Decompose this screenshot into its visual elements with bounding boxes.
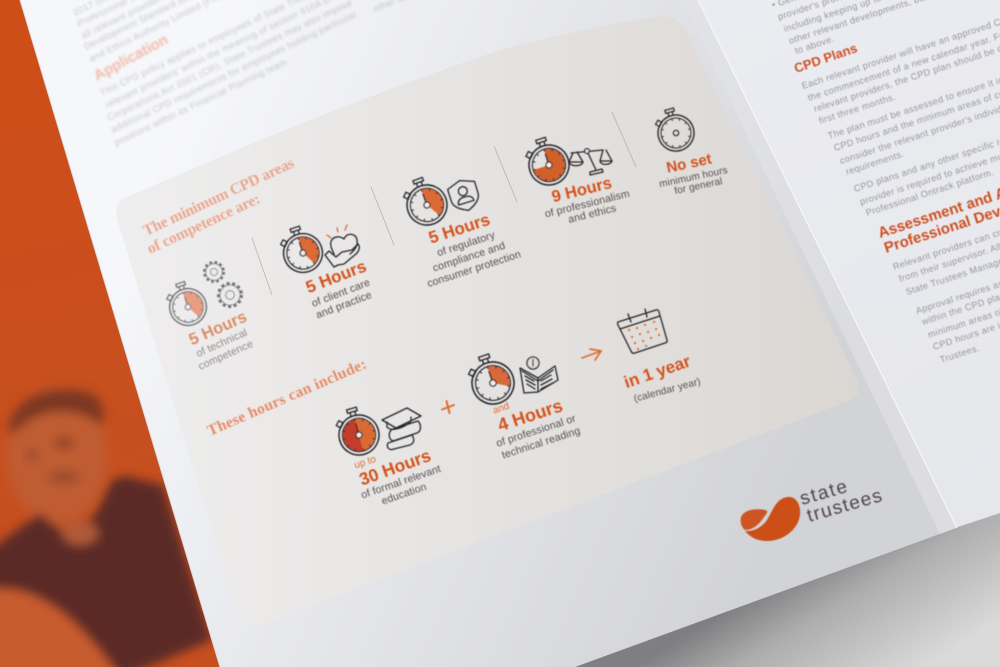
text: right page body copy [771, 0, 1000, 365]
heading: minimum CPD areas: of competence are: [145, 190, 263, 258]
logo: State Trustees [741, 476, 884, 541]
item: 9 hours professionalism: of professionalism [544, 188, 631, 220]
label: up to [353, 454, 378, 471]
item: 5 hours client care: and practice [314, 289, 374, 321]
icon: graduation cap and books [382, 408, 421, 450]
item: up to 30 hours education [332, 403, 443, 507]
icon: stopwatch [521, 133, 574, 190]
item: 5 hours regulatory [399, 172, 522, 290]
text: right page body copy: to above. [794, 34, 836, 56]
item: and 4 hours reading: 4 Hours [495, 395, 565, 435]
label: 9 Hours [550, 174, 614, 206]
icon: stopwatch [464, 349, 520, 410]
text: left page blurred body copy: additional CPD requirements for employees holding particular [110, 9, 359, 135]
item: up to 30 hours education: of formal relevant [360, 463, 443, 501]
text: right page body copy: Trustees. [939, 343, 981, 365]
icon: stopwatch [276, 222, 327, 277]
item: up to 30 hours education: 30 Hours [356, 445, 434, 490]
icon: open book with info [520, 357, 558, 393]
item: and 4 hours reading: of professional or [495, 412, 578, 450]
text: right page body copy: CPD Plans [792, 40, 859, 76]
item: no set minimum general: minimum hours [658, 165, 729, 190]
icon: stopwatch [399, 172, 453, 231]
item: up to 30 hours education: education [380, 481, 428, 507]
label: 5 Hours [303, 257, 369, 297]
label: 5 Hours [186, 308, 250, 349]
item: 9 hours professionalism [521, 133, 631, 226]
heading: these hours can include: These hours can include: [205, 355, 369, 440]
text: left page blurred body copy [71, 0, 412, 148]
icon: scales [569, 149, 612, 175]
icon: shield person [446, 177, 482, 214]
icon: gears [204, 262, 242, 306]
item: 5 hours technical competence: competence [197, 338, 255, 373]
item: 5 hours client care [276, 222, 374, 321]
panel: CPD areas [116, 16, 859, 625]
icon: arrow [582, 349, 601, 360]
panel: orange cover photo [0, 0, 240, 667]
item: 5 hours regulatory: of regulatory [436, 229, 497, 259]
icon: calendar [618, 309, 667, 353]
label: and [492, 401, 511, 416]
icon: stopwatch full [332, 403, 384, 460]
label: 5 Hours [426, 210, 492, 248]
item: and 4 hours reading [464, 349, 582, 461]
text: left page blurred body copy: positions within its Financial Planning team. [113, 56, 291, 148]
heading: minimum CPD areas: The minimum CPD areas [141, 154, 297, 240]
icon: stopwatch [163, 277, 211, 330]
item: no set minimum general: for general [673, 176, 724, 197]
item: 5 hours client care: of client care [310, 277, 372, 310]
label: in 1 year [621, 351, 693, 392]
icon: stopwatch empty [652, 104, 698, 155]
item: in 1 year: (calendar year) [633, 376, 702, 405]
text: left page blurred body copy: Corporations Act 2001 (Cth). State Trustees may also impose [106, 0, 354, 123]
text: right page body copy: first three months. [818, 92, 897, 126]
text: right page body copy: requirements. [845, 149, 905, 177]
dividers [252, 112, 636, 295]
item: and 4 hours reading: technical reading [500, 425, 582, 461]
icon: plus [442, 401, 454, 413]
icon: hand and heart [325, 225, 359, 267]
heading: Application: Application [91, 31, 171, 85]
logo: State Trustees: state [798, 476, 850, 510]
label: No set [665, 151, 713, 177]
item: 9 hours professionalism: and ethics [567, 202, 618, 226]
item: 5 hours technical competence: of technical [194, 327, 249, 360]
panel: right page [695, 0, 1000, 528]
item: 5 hours technical competence [163, 262, 255, 373]
icon: logo mark [741, 509, 767, 530]
item: 5 hours regulatory: consumer protection [426, 248, 522, 290]
item: no set minimum general [652, 104, 729, 197]
text: right page body copy: Professional Ontrack platform. [865, 167, 995, 218]
item: 5 hours regulatory: compliance and [431, 240, 507, 275]
item: in 1 year [618, 309, 702, 405]
logo: State Trustees: trustees [805, 485, 884, 527]
